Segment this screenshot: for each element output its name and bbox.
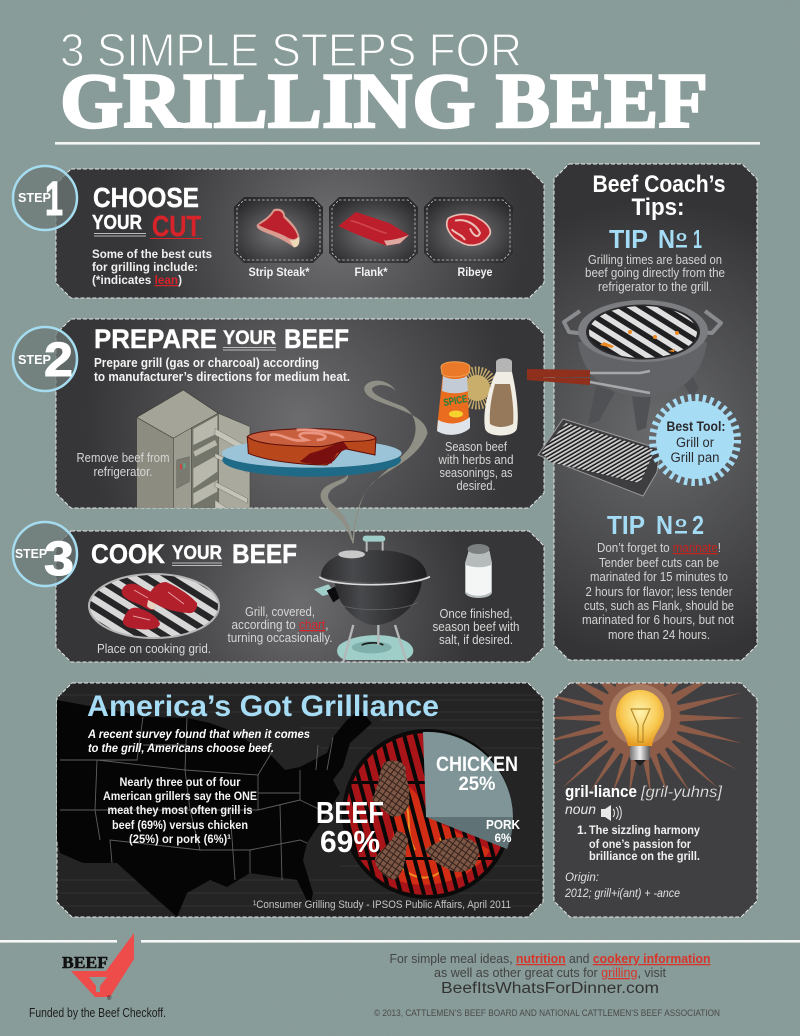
step 2 heading: BEEF (284, 324, 349, 354)
chicken label: 25% (458, 774, 496, 795)
light rays (554, 683, 744, 795)
step 2 heading: PREPARE (94, 324, 217, 354)
noun label: noun (565, 801, 596, 817)
tip 2 heading (607, 510, 704, 540)
pork label: PORK (486, 818, 520, 832)
step 1 badge (13, 166, 77, 230)
footer call to action: For simple meal ideas, nutrition and cookery information (390, 952, 710, 966)
season text: seasonings, as (440, 466, 512, 480)
tips heading: Beef Coach’s (592, 171, 726, 198)
beef logo: BEEF (62, 953, 108, 972)
tip 1 text: refrigerator to the grill. (598, 280, 712, 294)
cooking grid with steaks (89, 574, 219, 638)
cut tile: strip steak (234, 197, 323, 263)
pie chart over grill (316, 729, 520, 900)
step 2 heading (94, 324, 349, 354)
tip 1 text: beef going directly from the (585, 266, 725, 280)
tip 2 text: marinated for 6 hours, but not (582, 613, 734, 627)
step 2 heading: YOUR (223, 328, 276, 349)
tip 2 text: marinated for 15 minutes to (590, 570, 728, 584)
step 2 badge: 2 (44, 334, 73, 387)
funded by text: Funded by the Beef Checkoff. (29, 1006, 166, 1020)
footer call to action: BeefItsWhatsForDinner.com (441, 980, 659, 997)
grill covered text: Grill, covered, (245, 605, 315, 619)
copyright: © 2013, CATTLEMEN’S BEEF BOARD AND NATIONAL CATTLEMEN’S BEEF ASSOCIATION (374, 1008, 720, 1019)
kettle grill (314, 536, 430, 662)
step 3 heading: BEEF (232, 539, 297, 569)
cut labels: Ribeye (458, 267, 492, 279)
step 1 heading: CHOOSE (93, 182, 199, 213)
origin text (564, 870, 680, 900)
remove beef text: refrigerator. (94, 465, 152, 479)
step 1 heading (92, 182, 202, 243)
step 1 intro text: Some of the best cuts (92, 247, 212, 261)
spice shakers (437, 358, 518, 436)
tip 2 heading: o (675, 514, 687, 531)
remove beef text: Remove beef from (76, 451, 170, 465)
origin text: Origin: (565, 870, 599, 884)
beef label: BEEF (316, 795, 384, 830)
america heading: America’s Got Grilliance (87, 690, 439, 723)
step 1 intro text (92, 247, 212, 287)
cut labels: Flank* (354, 267, 388, 279)
beef logo (62, 933, 134, 1002)
best tool starburst (653, 398, 737, 482)
survey intro: A recent survey found that when it comes (87, 727, 310, 741)
beef label: 69% (320, 824, 380, 859)
panel: beef coach tips (538, 164, 757, 660)
title: GRILLING BEEF (60, 57, 708, 144)
step 3 heading (91, 539, 297, 569)
once finished text: Once finished, (440, 607, 512, 621)
step 1 intro text: for grilling include: (92, 260, 198, 274)
definition text: The sizzling harmony (589, 823, 700, 837)
title: 3 SIMPLE STEPS FOR (60, 24, 522, 76)
tips heading (592, 171, 726, 221)
survey finding (103, 775, 257, 846)
tip 1 text (585, 253, 725, 294)
footer call to action (390, 952, 710, 997)
source note: ¹Consumer Grilling Study - IPSOS Public Affairs, April 2011 (253, 899, 511, 911)
cut tile: flank (329, 197, 418, 263)
step 2 instructions (94, 355, 350, 384)
step 3 badge: STEP (15, 546, 47, 561)
grilled steaks (372, 761, 479, 880)
step 3 badge (13, 522, 77, 586)
tip 2 heading: TIP (607, 510, 645, 540)
step 3 heading: COOK (91, 539, 165, 569)
step 1 heading: YOUR (92, 212, 142, 234)
plate and steak (222, 429, 402, 477)
step 2 badge: STEP (18, 352, 51, 367)
grill covered text: turning occasionally. (228, 631, 332, 645)
season text (438, 440, 514, 493)
tip 1 heading: o (676, 228, 687, 245)
chicken label (436, 753, 518, 795)
definition heading: gril-liance (565, 782, 637, 801)
best tool text: Grill or (676, 435, 714, 450)
survey finding: beef (69%) versus chicken (112, 818, 248, 832)
cut labels (248, 267, 492, 279)
panel: grilliance definition (554, 682, 758, 918)
pronunciation: [gril-yuhns] (640, 784, 723, 801)
once finished text: season beef with (432, 620, 520, 634)
footer rule (0, 940, 800, 943)
beef label (316, 795, 384, 859)
tip 2 text: more than 24 hours. (608, 628, 710, 642)
tip 2 text: Tender beef cuts can be (599, 556, 719, 570)
place on grid text: Place on cooking grid. (97, 642, 211, 656)
title (60, 24, 708, 144)
step 2 instructions: to manufacturer’s directions for medium heat. (94, 369, 350, 384)
icon: speaker (601, 805, 621, 821)
season text: with herbs and (438, 453, 514, 467)
panel: step 2 prepare your beef (56, 319, 544, 510)
definition text: 1. (577, 823, 587, 837)
grill illustration (564, 300, 721, 431)
survey finding: Nearly three out of four (120, 775, 241, 789)
survey intro: to the grill, Americans choose beef. (88, 741, 274, 755)
survey intro (87, 727, 310, 755)
panel: step 3 cook your beef (56, 531, 544, 662)
remove beef text (76, 451, 170, 479)
grill covered text: according to chart, (232, 618, 328, 632)
survey finding: American grillers say the ONE (103, 789, 257, 803)
tip 1 text: Grilling times are based on (588, 253, 722, 267)
tip 1 heading (609, 224, 702, 254)
once finished text (432, 607, 520, 647)
grill pan (538, 419, 660, 496)
origin text: 2012; grill+i(ant) + -ance (564, 886, 680, 900)
step 1 badge: 1 (45, 173, 63, 226)
tip 1 heading: 1 (693, 224, 702, 254)
best tool text (666, 419, 726, 465)
tongs crossing panels (527, 369, 650, 393)
footer call to action: as well as other great cuts for grilling, visit (434, 966, 667, 980)
step 1 heading: CUT (152, 211, 201, 243)
panel: america's got grilliance (57, 683, 543, 917)
pie slice: pork 6% (426, 817, 513, 849)
tip 2 text: Don’t forget to marinate! (597, 541, 721, 555)
wood texture (60, 695, 540, 906)
refrigerator illustration (137, 390, 250, 510)
step 1 intro text: (*indicates lean) (92, 273, 182, 287)
pork label: 6% (494, 831, 512, 845)
tips heading: Tips: (632, 194, 684, 221)
smoke rising from grill (321, 381, 428, 543)
tip 1 heading: N (658, 224, 675, 254)
tip 2 text: 2 hours for flavor; less tender (586, 585, 732, 599)
season text: Season beef (445, 440, 507, 454)
definition text: brilliance on the grill. (589, 849, 700, 863)
step 2 instructions: Prepare grill (gas or charcoal) according (94, 355, 319, 370)
tip 1 heading: TIP (609, 224, 648, 254)
tip 2 text (582, 541, 734, 642)
salt shaker (465, 544, 492, 598)
step 3 badge: 3 (44, 533, 74, 586)
best tool text: Best Tool: (666, 419, 726, 434)
step 1 badge: STEP (18, 190, 51, 205)
best tool text: Grill pan (670, 450, 720, 465)
chicken label: CHICKEN (436, 753, 518, 776)
pork label (486, 818, 520, 845)
definition text (577, 823, 700, 863)
US map (57, 700, 372, 917)
season text: desired. (456, 479, 496, 493)
survey finding: (25%) or pork (6%)¹ (129, 832, 231, 846)
tip 2 text: cuts, such as Flank, should be (584, 599, 734, 613)
pie slice: chicken 25% (423, 732, 513, 817)
cut labels: Strip Steak* (248, 267, 310, 279)
spice shakers: SPICE (443, 393, 468, 409)
tip 2 heading: 2 (692, 510, 704, 540)
tip 2 heading: N (656, 510, 673, 540)
step 3 heading: YOUR (172, 543, 222, 564)
grill covered text (228, 605, 332, 645)
beef logo: ® (107, 995, 112, 1002)
panel: step 1 choose your cut (56, 169, 544, 298)
once finished text: salt, if desired. (439, 633, 513, 647)
definition text: of one’s passion for (589, 837, 691, 851)
survey finding: meat they most often grill is (108, 803, 253, 817)
step 2 badge (13, 327, 77, 391)
cut tile: ribeye (424, 197, 513, 263)
light bulb (616, 690, 664, 766)
